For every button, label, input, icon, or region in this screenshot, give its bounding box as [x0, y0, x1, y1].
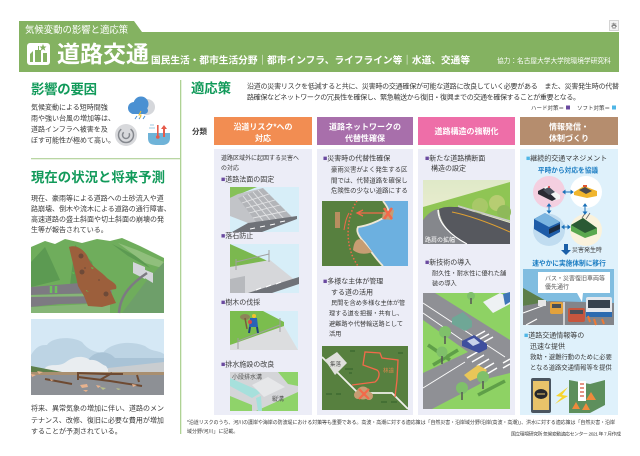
column header: network redundancy: 道路ネットワークの — [329, 122, 401, 132]
credit: institute and date: 国立環境研究所 気候変動適応センター 2021 年 7 月作成 — [511, 430, 621, 438]
illustration: priority bus lane — [523, 269, 614, 325]
text: future projection — [31, 404, 164, 436]
text: roadside risk intro — [221, 154, 299, 172]
column body: roadside risk — [214, 149, 312, 415]
panel: impact factors — [31, 81, 170, 146]
vehicle: yellow car — [464, 365, 487, 381]
legend: hard and soft measures — [531, 104, 616, 112]
text: current situation: 現在、豪雨等による道路への土砂流入や道 — [31, 194, 164, 202]
column: road structure — [418, 117, 515, 415]
text: roadside risk intro: の対応 — [221, 164, 239, 172]
label: category: 分類 — [192, 126, 207, 136]
text: alternate routes: 危険性の少ない道路にする — [331, 186, 408, 194]
illustration: drainage: 縦溝 — [272, 395, 284, 403]
illustration: drainage: 小段排水溝 — [232, 373, 262, 381]
column header: information and systems: 体制づくり — [549, 133, 589, 143]
illustration: landslide — [31, 238, 164, 313]
item heading: diverse road managers: ■多様な主体が管理 — [323, 276, 383, 286]
vehicle: teal car — [452, 312, 472, 331]
panel: current and future — [31, 169, 171, 436]
icon: typhoon swirl — [115, 124, 137, 146]
text: impact factors: 雨や強い台風の増加等は、 — [31, 114, 115, 122]
text: impact factors: 道路インフラへ被害を及 — [31, 124, 108, 134]
arrows between vehicles — [548, 190, 586, 228]
vehicle: white truck — [483, 292, 510, 313]
item heading: tree felling: ■樹木の伐採 — [221, 298, 260, 306]
map: forest road: 集落 — [330, 360, 342, 368]
map: forest road — [322, 346, 408, 410]
illustration: intersection — [423, 292, 510, 409]
illustration: flood debris on road — [31, 319, 164, 395]
icon: page tag — [610, 20, 618, 30]
footnote: *沿道リスクのうち、河川の護岸や海岸の防波堤における対策等も重要である。高波・高潮に対する適応策は「自然災害・沿岸域分野/沿岸(高波・高潮)」、洪水に対する適応策は「自然災害・沿岸 — [187, 419, 615, 426]
text: diverse road managers: 避難路や代替輸送路として — [329, 320, 403, 328]
footnote — [187, 419, 615, 435]
heading: impact factors: 影響の要因 — [31, 81, 97, 97]
icon: rain cloud — [128, 96, 155, 119]
item heading: traffic management: ■継続的交通マネジメント — [526, 154, 607, 162]
item heading: diverse road managers — [323, 276, 383, 296]
text: current situation: 高速道路の盛土斜面や切土斜面の崩壊の発 — [31, 214, 164, 224]
icon: smartphone — [531, 378, 551, 413]
text: future projection: 将来、異常気象の増加に伴い、道路のメン — [31, 404, 164, 412]
text: future projection: することが予測されている。 — [31, 426, 122, 436]
column: roadside risk — [214, 117, 312, 415]
item heading: rapid traffic information — [524, 330, 584, 350]
text: current situation: 路崩壊、倒木や流木による道路の通行障害、 — [31, 204, 171, 213]
illustration: road closure sign — [569, 380, 605, 413]
icon: lightning — [555, 387, 568, 404]
heading: current and future: 現在の状況と将来予測 — [31, 169, 165, 185]
text: diverse road managers: 理する道を把握・共有し、 — [329, 310, 403, 318]
illustration: tree felling — [230, 311, 298, 350]
text: new technology — [432, 270, 506, 288]
text: adaptation intro: 沿道の災害リスクを低減すると共に、災害時の交通確保が可能な道路に改良していく必要がある また、災害発生時の代替 — [247, 82, 619, 90]
arrow: when disaster occurs: 災害発生時 — [572, 246, 602, 254]
text: rapid traffic information: 救助・避難行動のために必要 — [530, 352, 613, 361]
text: diverse road managers — [329, 299, 405, 338]
item heading: alternate routes: ■災害時の代替性確保 — [323, 154, 390, 162]
column body: road structure — [418, 149, 515, 415]
map: alternate route — [322, 201, 408, 266]
label: shift to emergency system: 速やかに実施体制に移行 — [532, 258, 606, 268]
item heading: rapid traffic information: 迅速な提供 — [530, 342, 565, 350]
item heading: drainage improvement: ■排水施設の改良 — [221, 360, 274, 368]
icon: bus — [534, 213, 560, 238]
column header: information and systems — [520, 117, 618, 145]
text: adaptation intro: 路確保などネットワークの冗長性を確保し、緊急輸送から復旧・復興までの交通を確保することが重要となる。 — [247, 92, 580, 102]
column header: roadside risk: 沿道リスク*への — [233, 122, 293, 132]
illustration: priority bus lane: 優先通行 — [545, 283, 569, 291]
map: forest road: 林道 — [383, 366, 395, 374]
text: new technology: 耐久性・耐水性に優れた舗 — [432, 270, 506, 278]
text: alternate routes — [331, 164, 408, 194]
text: rapid traffic information: となる道路交通情報等を提供 — [530, 362, 612, 372]
vertical separator — [180, 80, 181, 434]
illustration: road shoulder — [423, 180, 511, 244]
icon: taxi — [574, 185, 597, 198]
column header: roadside risk: 対応 — [255, 133, 271, 143]
text: alternate routes: 間では、代替道路を確保し — [331, 176, 408, 184]
main title: 道路交通 — [57, 41, 149, 67]
label: coordinate in normal times: 平時から対応を協議 — [538, 166, 598, 174]
column header: road structure: 道路構造の強靭化 — [434, 126, 498, 136]
illustration: rockfall prevention — [230, 244, 299, 293]
text: impact factors — [31, 102, 115, 144]
column: information and systems — [520, 117, 618, 415]
header tab label: 気候変動の影響と適応策 — [25, 24, 129, 35]
item heading: new technology: ■新技術の導入 — [425, 258, 471, 266]
diagram: transport coordination — [533, 176, 602, 246]
text: rapid traffic information — [530, 352, 613, 372]
text: diverse road managers: 民間を含め多様な主体が管 — [331, 299, 405, 307]
text: adaptation intro — [247, 82, 619, 102]
text: impact factors: ぼす可能性が極めて高い。 — [31, 136, 115, 144]
footnote: 域分野/河川」に記載。 — [187, 428, 238, 435]
column header: roadside risk — [214, 117, 312, 145]
column: network redundancy — [317, 117, 413, 415]
text: new technology: 装の導入 — [432, 280, 457, 288]
divider line — [31, 158, 180, 159]
item heading: slope fixing: ■道路法面の固定 — [221, 174, 274, 184]
icon: page tag: 春 — [611, 22, 617, 30]
header band — [19, 21, 619, 72]
column body: network redundancy — [317, 149, 413, 415]
illustration: slope lattice — [230, 187, 299, 232]
item heading: diverse road managers: する道の活用 — [331, 288, 373, 296]
icon: tram — [571, 212, 597, 238]
item heading: new cross section: ■新たな道路横断面 — [425, 154, 485, 162]
item heading: new cross section: 構造の設定 — [431, 164, 466, 172]
illustration: priority bus lane: バス・災害復旧車両等 — [545, 274, 605, 282]
column header: road structure — [418, 117, 515, 145]
illustration: drainage — [230, 372, 298, 411]
column header: network redundancy — [317, 117, 413, 145]
icon: police car — [538, 186, 560, 201]
vehicle: blue car — [462, 335, 487, 353]
column header: information and systems: 情報発信・ — [549, 122, 589, 132]
arrow: when disaster occurs — [561, 244, 602, 255]
legend: hard and soft measures: ハード対策＝ — [531, 104, 564, 112]
item heading: rockfall prevention: ■落石防止 — [221, 231, 253, 240]
illustration: road shoulder: 路肩の拡幅 — [425, 236, 455, 244]
text: current situation: 生等が報告されている。 — [31, 225, 108, 234]
column body: information and systems — [520, 149, 618, 415]
text: current situation — [31, 194, 171, 234]
subtitle: sectors: 国民生活・都市生活分野｜都市インフラ、ライフライン等｜水道、交通等 — [151, 54, 470, 66]
text: diverse road managers: 活用 — [329, 330, 341, 338]
text: future projection: テナンス、改修、復旧に必要な費用が増加 — [31, 416, 164, 424]
cooperation credit: 協力：名古屋大学大学院環境学研究科 — [497, 56, 611, 65]
text: roadside risk intro: 道路区域外に起因する災害へ — [221, 154, 299, 162]
item heading: new cross section — [425, 154, 485, 172]
legend: hard and soft measures: ソフト対策＝ — [577, 104, 610, 112]
icon: water temperature — [148, 125, 170, 145]
text: alternate routes: 豪雨災害がよく発生する区 — [331, 164, 408, 174]
item heading: rapid traffic information: ■道路交通情報等の — [524, 330, 584, 340]
column header: network redundancy: 代替性確保 — [345, 133, 385, 143]
icon: city buildings — [27, 43, 50, 65]
text: impact factors: 気候変動による短時間強 — [31, 102, 108, 112]
heading: adaptation measures: 適応策 — [191, 80, 232, 96]
